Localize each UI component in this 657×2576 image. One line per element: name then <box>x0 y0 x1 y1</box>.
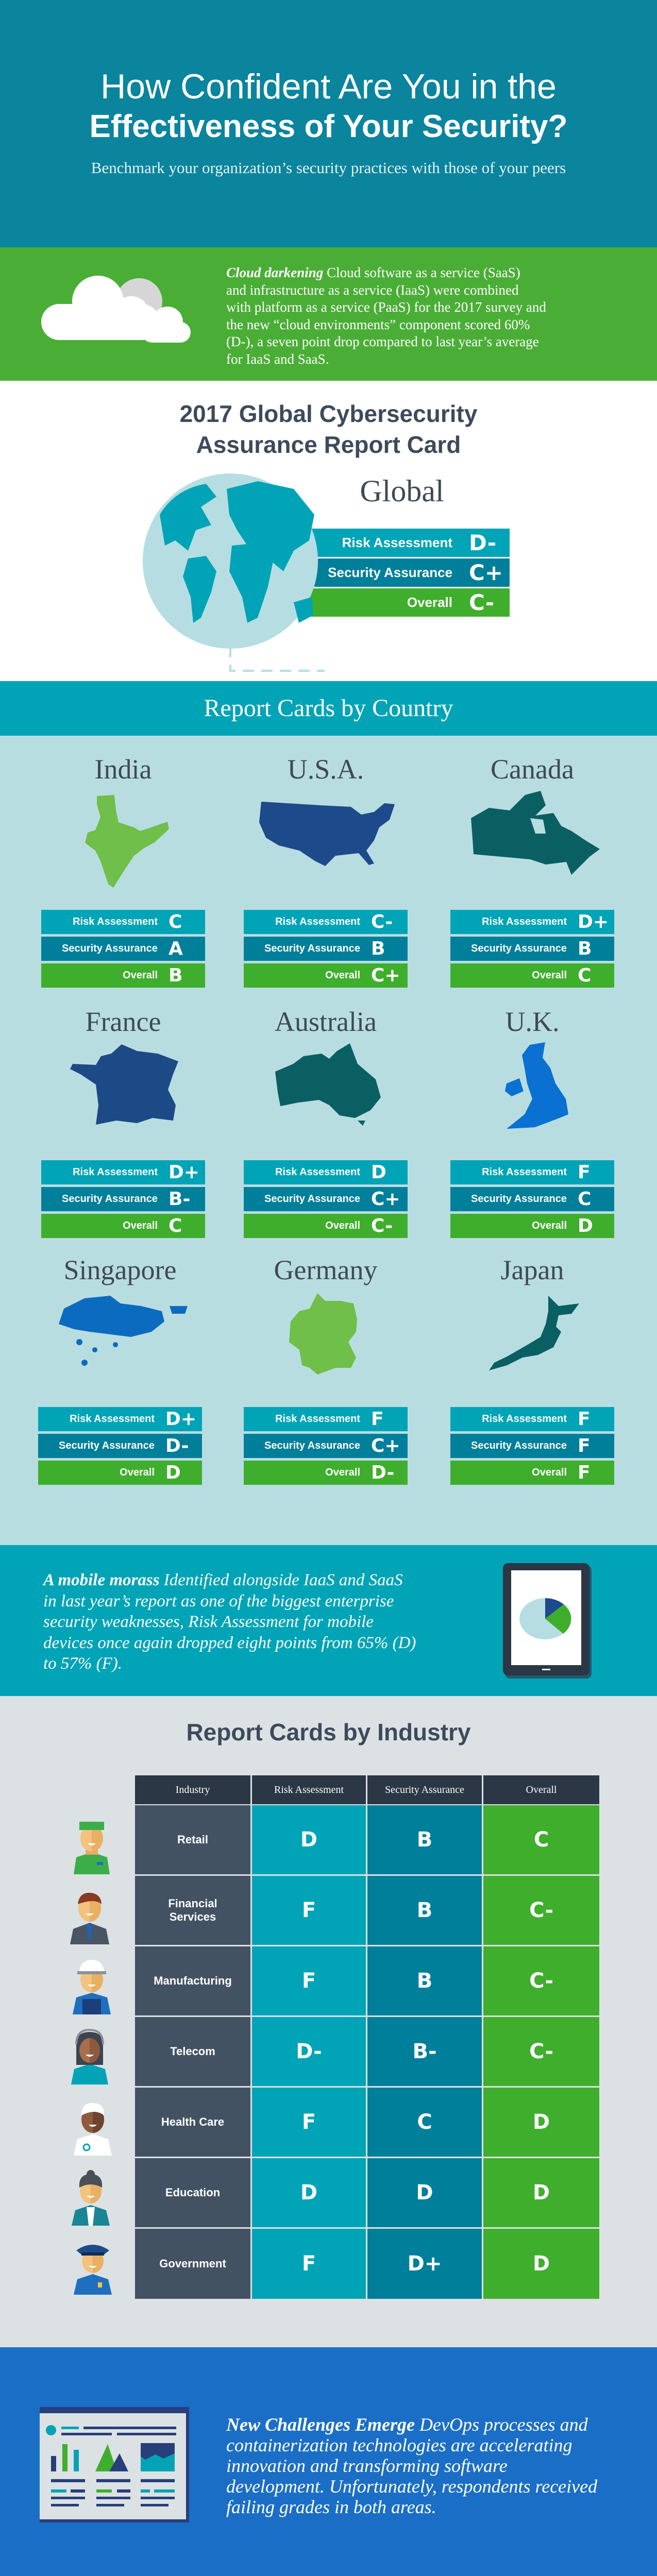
country: Japan <box>450 1255 614 1485</box>
heading: global report card: Assurance Report Card <box>196 431 461 458</box>
industry table: C <box>417 2110 432 2134</box>
industry table: F <box>302 2252 316 2276</box>
industry table: D <box>416 2181 433 2205</box>
text: cloud darkening: for IaaS and SaaS. <box>226 351 329 367</box>
icon: health care worker <box>74 2103 112 2156</box>
country: Germany: Overall <box>325 1467 360 1478</box>
text: mobile morass: A mobile morass Identified alongside IaaS and SaaS <box>43 1571 403 1589</box>
icons: industry people <box>70 1822 112 2295</box>
text: cloud darkening <box>226 265 546 367</box>
industry table: F <box>302 1899 316 1922</box>
map: Singapore <box>59 1296 188 1366</box>
country: Japan: Overall <box>532 1467 567 1478</box>
country: Australia <box>244 1006 408 1238</box>
country: UK: U.K. <box>505 1006 560 1037</box>
country: Singapore: D- <box>165 1435 189 1456</box>
text: cloud darkening: the new “cloud environments” component scored 60% <box>226 316 530 332</box>
text: mobile morass: security weaknesses, Risk Assessment for mobile <box>43 1613 374 1631</box>
industry table: B- <box>412 2040 437 2063</box>
country: Germany: Security Assurance <box>264 1440 360 1451</box>
country: Singapore <box>38 1255 202 1485</box>
industry table: Overall <box>526 1784 557 1795</box>
heading: global report card: 2017 Global Cybersecurity <box>180 400 477 427</box>
text: cloud darkening: and infrastructure as a service (IaaS) were combined <box>226 282 518 298</box>
country: UK: D <box>578 1215 593 1236</box>
country: India: Overall <box>123 970 158 981</box>
country: Germany: C+ <box>371 1435 400 1456</box>
industry table: Retail <box>177 1833 208 1846</box>
country: USA: Overall <box>325 970 360 981</box>
text: cloud darkening: (D-), a seven point drop compared to last year’s average <box>226 334 539 349</box>
map: UK <box>505 1042 568 1129</box>
country: Australia: Australia <box>275 1006 377 1037</box>
country: UK: C <box>578 1189 591 1210</box>
industry table: D <box>533 2252 550 2276</box>
country: France: C <box>169 1215 182 1236</box>
table header: Industry <box>176 1784 210 1795</box>
industry table: C <box>534 1828 549 1852</box>
country: Singapore: Singapore <box>64 1255 176 1285</box>
country: UK <box>450 1006 614 1238</box>
country: France: B- <box>169 1189 190 1210</box>
icon: retail worker <box>74 1822 110 1874</box>
label: Global: Global <box>360 474 444 508</box>
country: France: Risk Assessment <box>73 1166 158 1178</box>
country: Singapore: Risk Assessment <box>70 1413 155 1425</box>
text: mobile morass: in last year’s report as one of the biggest enterprise <box>43 1592 394 1611</box>
panel: report cards by country <box>0 681 657 1545</box>
heading: global report card <box>180 400 477 458</box>
country: Canada <box>450 754 614 988</box>
title <box>89 67 568 144</box>
country: Australia: C- <box>371 1215 393 1236</box>
heading: report cards by country: Report Cards by Country <box>204 694 453 722</box>
text: cloud darkening: with platform as a service (PaaS) for the 2017 survey and <box>226 299 546 315</box>
industry table: B <box>417 1969 432 1993</box>
text: cloud darkening: Cloud darkening Cloud software as a service (SaaS) <box>226 265 520 280</box>
country: Australia: Overall <box>325 1220 360 1231</box>
country: USA: C- <box>371 911 393 933</box>
country: India: India <box>95 754 151 785</box>
country: Canada: Overall <box>532 970 567 981</box>
text: new challenges emerge: development. Unfortunately, respondents received <box>226 2476 597 2497</box>
global grades <box>310 529 510 617</box>
title: Effectiveness of Your Security? <box>89 109 568 144</box>
industry table: Telecom <box>170 2045 215 2058</box>
industry table: D <box>300 1828 317 1852</box>
text: new challenges emerge: failing grades in both areas. <box>226 2497 436 2517</box>
title: How Confident Are You in the <box>100 67 557 106</box>
text: mobile morass <box>42 1571 416 1673</box>
icon: tablet with pie chart <box>503 1563 592 1679</box>
country: UK: Risk Assessment <box>482 1166 567 1178</box>
country: USA: U.S.A. <box>288 754 364 785</box>
heading: report cards by industry: Report Cards by Industry <box>186 1719 471 1745</box>
global grades: Overall <box>407 595 452 610</box>
industry table: D <box>533 2110 550 2134</box>
map: USA <box>259 802 395 866</box>
panel: mobile morass <box>0 1545 657 1696</box>
icon: dashboard <box>40 2407 189 2522</box>
industry table: C- <box>529 1969 553 1993</box>
table header <box>135 1775 250 1804</box>
panel: new challenges emerge <box>0 2347 657 2576</box>
country: Canada: Security Assurance <box>471 943 567 954</box>
country: USA: B <box>371 938 385 959</box>
country: France: Security Assurance <box>62 1193 158 1205</box>
map: Japan <box>489 1296 579 1370</box>
country: USA: Risk Assessment <box>275 916 360 927</box>
country: India: C <box>169 911 182 933</box>
country: Canada: B <box>578 938 592 959</box>
country: USA: Security Assurance <box>264 943 360 954</box>
industry table: Financial <box>168 1897 217 1910</box>
panel: report cards by industry <box>0 1696 657 2347</box>
global grades: C+ <box>469 560 503 585</box>
country: Japan: F <box>578 1435 591 1456</box>
icon: manufacturing worker <box>73 1960 111 2014</box>
text: new challenges emerge: New Challenges Emerge DevOps processes and <box>226 2414 588 2435</box>
header panel <box>0 0 657 247</box>
text: new challenges emerge: containerization technologies are accelerating <box>226 2435 572 2455</box>
industry table: Government <box>159 2257 226 2270</box>
heading: report cards by country <box>0 681 657 736</box>
country: France <box>41 1006 205 1238</box>
country: Singapore: D+ <box>165 1409 196 1430</box>
country: Australia: Risk Assessment <box>275 1166 360 1178</box>
country: UK: Overall <box>532 1220 567 1231</box>
country: France: France <box>86 1006 161 1037</box>
country: India: Risk Assessment <box>73 916 158 927</box>
global grades: Security Assurance <box>328 565 452 580</box>
map: France <box>70 1044 178 1125</box>
country: Germany <box>244 1255 408 1485</box>
industry table: B <box>417 1828 432 1852</box>
map: Canada <box>471 791 600 875</box>
country: UK: F <box>578 1162 591 1183</box>
global grades: D- <box>469 530 496 555</box>
text: new challenges emerge <box>226 2414 598 2517</box>
country: Germany: Risk Assessment <box>275 1413 360 1425</box>
text: new challenges emerge: innovation and transforming software <box>226 2455 508 2476</box>
industry table: D <box>533 2181 550 2205</box>
icon: globe <box>143 473 325 672</box>
industry table: Manufacturing <box>154 1974 232 1987</box>
industry table: D <box>300 2181 317 2205</box>
country: Australia: Security Assurance <box>264 1193 360 1205</box>
country: Japan: F <box>578 1462 591 1483</box>
subtitle: Benchmark your organization’s security practices with those of your peers <box>91 159 566 177</box>
industry table: D- <box>296 2040 322 2063</box>
icon: clouds <box>41 276 191 343</box>
industry table: Risk Assessment <box>274 1784 344 1795</box>
global grades: Risk Assessment <box>342 535 452 550</box>
country: Singapore: Security Assurance <box>59 1440 155 1451</box>
icon: government worker <box>74 2245 112 2295</box>
industry table: B <box>417 1899 432 1922</box>
country: Germany: Germany <box>274 1255 377 1285</box>
country: France: Overall <box>123 1220 158 1231</box>
country: Canada: C <box>578 965 591 986</box>
country: Germany: D- <box>371 1462 395 1483</box>
industry table: C- <box>529 1899 553 1922</box>
industry table: F <box>302 2110 316 2134</box>
icon: telecom worker <box>71 2029 108 2084</box>
industry table: D+ <box>408 2252 442 2276</box>
text: mobile morass: to 57% (F). <box>43 1654 122 1673</box>
text: mobile morass: devices once again dropped eight points from 65% (D) <box>43 1633 416 1652</box>
country: USA: C+ <box>371 965 400 986</box>
country: Canada: D+ <box>578 911 609 933</box>
country: Japan: Security Assurance <box>471 1440 567 1451</box>
country: Germany: F <box>371 1409 384 1430</box>
industry table: C- <box>529 2040 553 2063</box>
country: India <box>41 754 205 988</box>
country: UK: Security Assurance <box>471 1193 567 1205</box>
panel: global report card <box>0 381 657 681</box>
map: Germany <box>289 1293 357 1375</box>
industry table: Health Care <box>161 2115 224 2128</box>
country: Canada: Canada <box>491 754 574 785</box>
country: India: B <box>169 965 182 986</box>
country: Japan: Risk Assessment <box>482 1413 567 1425</box>
global grades: C- <box>469 590 494 615</box>
country: Singapore: Overall <box>120 1467 155 1478</box>
country: Singapore: D <box>165 1462 181 1483</box>
icon: financial worker <box>70 1893 109 1944</box>
country: Australia: D <box>371 1162 386 1183</box>
country: Japan: Japan <box>501 1255 564 1285</box>
country: Canada: Risk Assessment <box>482 916 567 927</box>
country: France: D+ <box>169 1162 199 1183</box>
map: Australia <box>275 1043 381 1126</box>
country: Japan: F <box>578 1409 591 1430</box>
industry table: Security Assurance <box>385 1784 464 1795</box>
industry table: Services <box>170 1910 216 1923</box>
industry table: Education <box>165 2186 220 2199</box>
panel: cloud darkening <box>0 247 657 381</box>
industry table: F <box>302 1969 316 1993</box>
map: India <box>85 795 169 888</box>
country: USA <box>244 754 408 988</box>
icon: education worker <box>72 2170 110 2226</box>
country: India: A <box>169 938 183 959</box>
country: Australia: C+ <box>371 1189 400 1210</box>
country: India: Security Assurance <box>62 943 158 954</box>
